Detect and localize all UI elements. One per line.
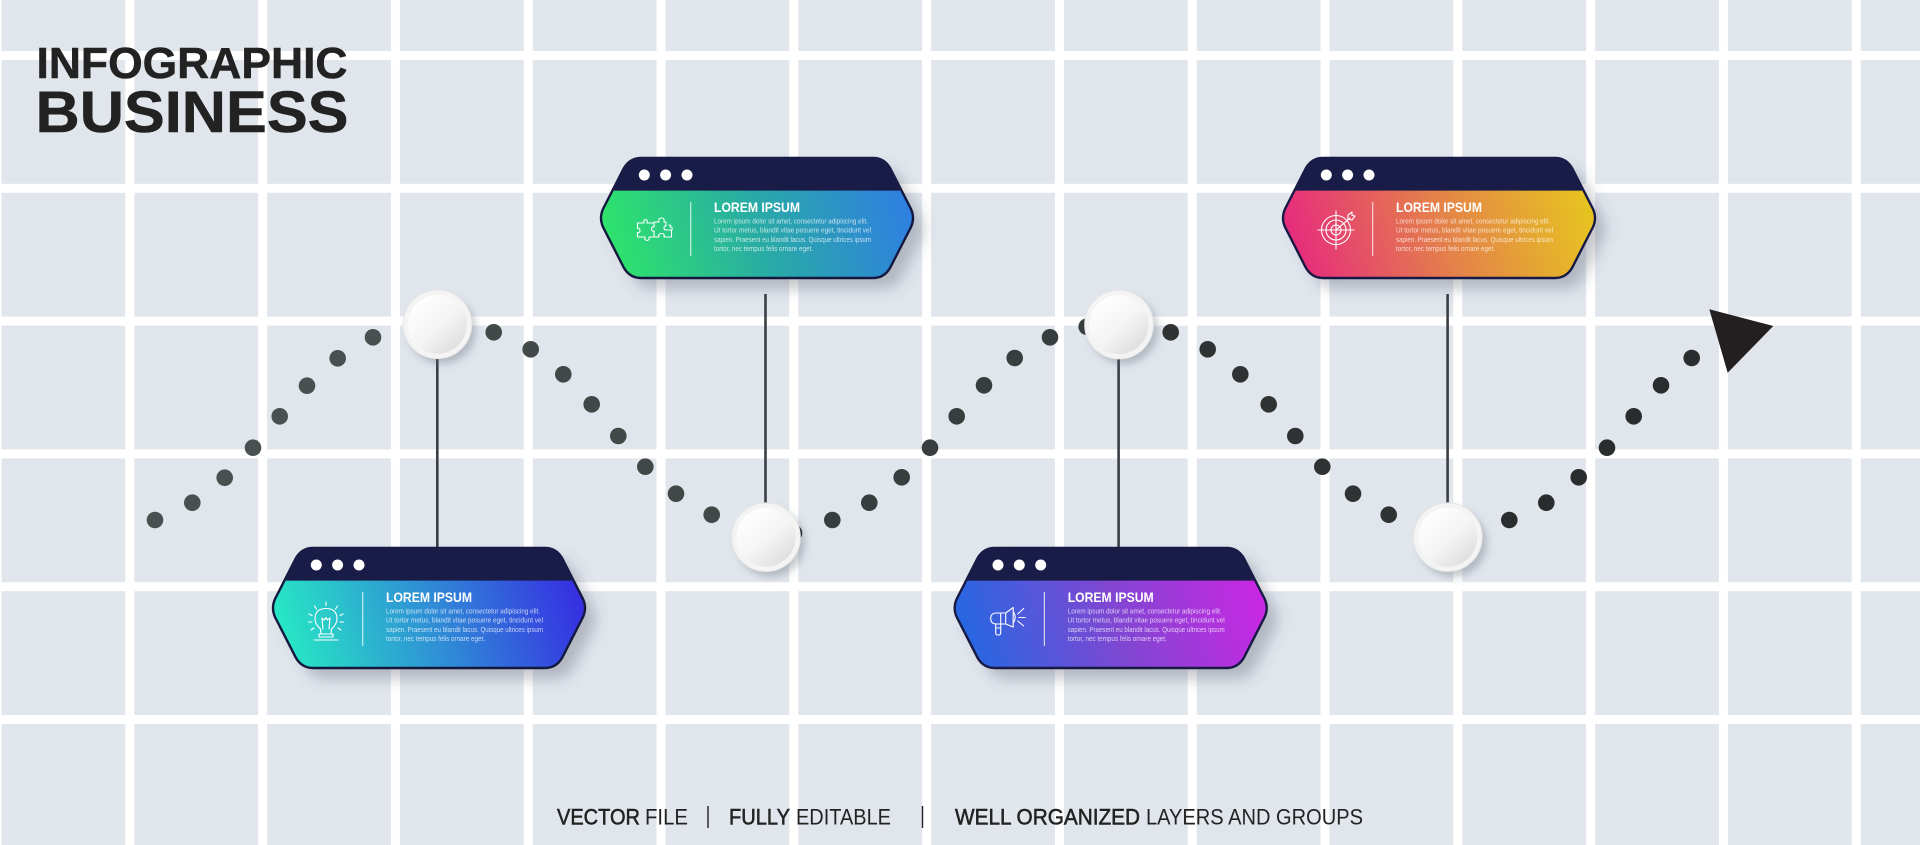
node circle 2 <box>732 503 805 577</box>
panel: target card (top right): sapien. Praesent eu blandit lacus. Quisque ultrices ipsum <box>1396 235 1553 244</box>
panel: target card (top right): Lorem ipsum dolor sit amet, consectetur adipiscing elit. <box>1396 216 1550 226</box>
panel: puzzle card (top left): Lorem ipsum dolor sit amet, consectetur adipiscing elit. <box>714 216 868 226</box>
node circle 4 <box>1414 503 1487 577</box>
panel: light bulb card (bottom left) <box>273 548 596 679</box>
icon: target <box>1318 211 1355 249</box>
title: INFOGRAPHIC <box>36 40 348 88</box>
panel: puzzle card (top left): sapien. Praesent eu blandit lacus. Quisque ultrices ipsum <box>714 235 871 244</box>
icon: megaphone <box>991 608 1025 635</box>
panel: megaphone card (bottom right): Lorem ipsum dolor sit amet, consectetur adipiscing elit. <box>1068 606 1222 616</box>
dotted wave path <box>147 318 1700 541</box>
title <box>36 40 348 145</box>
panel: light bulb card (bottom left): Ut tortor metus, blandit vitae posuere eget, tincidunt vel <box>386 616 543 625</box>
panel: puzzle card (top left): Ut tortor metus, blandit vitae posuere eget, tincidunt vel <box>714 226 871 235</box>
footer tagline: LAYERS AND GROUPS <box>1146 804 1363 830</box>
icon: puzzle <box>638 218 672 240</box>
panel: light bulb card (bottom left): Lorem ipsum dolor sit amet, consectetur adipiscing elit. <box>386 606 540 616</box>
panel: light bulb card (bottom left): tortor, nec tempus felis ornare eget. <box>386 634 485 643</box>
icon: light bulb <box>308 602 344 640</box>
node circle 3 <box>1085 290 1158 364</box>
arrow head <box>1709 309 1773 373</box>
title: BUSINESS <box>36 80 348 145</box>
connector lines <box>437 294 1448 550</box>
footer tagline: FULLY <box>729 804 790 830</box>
panel: puzzle card (top left) <box>601 158 924 289</box>
footer tagline: VECTOR <box>557 804 640 830</box>
footer tagline <box>557 804 1363 830</box>
panel: megaphone card (bottom right): tortor, nec tempus felis ornare eget. <box>1068 634 1167 643</box>
footer tagline: WELL ORGANIZED <box>955 804 1140 830</box>
panel: target card (top right): tortor, nec tempus felis ornare eget. <box>1396 244 1495 253</box>
panel: light bulb card (bottom left): sapien. Praesent eu blandit lacus. Quisque ultrices ipsum <box>386 625 543 634</box>
panel: megaphone card (bottom right): sapien. Praesent eu blandit lacus. Quisque ultrices ipsum <box>1068 625 1225 634</box>
panel: target card (top right): LOREM IPSUM <box>1396 199 1482 215</box>
footer tagline: FILE <box>645 804 688 830</box>
panel: megaphone card (bottom right): LOREM IPSUM <box>1068 589 1154 605</box>
panel: target card (top right) <box>1283 158 1606 289</box>
panel: puzzle card (top left): LOREM IPSUM <box>714 199 800 215</box>
panel: light bulb card (bottom left): LOREM IPSUM <box>386 589 472 605</box>
footer tagline: EDITABLE <box>796 804 891 830</box>
panel: megaphone card (bottom right) <box>955 548 1278 679</box>
panel: puzzle card (top left): tortor, nec tempus felis ornare eget. <box>714 244 813 253</box>
node circle 1 <box>403 290 476 364</box>
panel: megaphone card (bottom right): Ut tortor metus, blandit vitae posuere eget, tincidunt vel <box>1068 616 1225 625</box>
panel: target card (top right): Ut tortor metus, blandit vitae posuere eget, tincidunt vel <box>1396 226 1553 235</box>
